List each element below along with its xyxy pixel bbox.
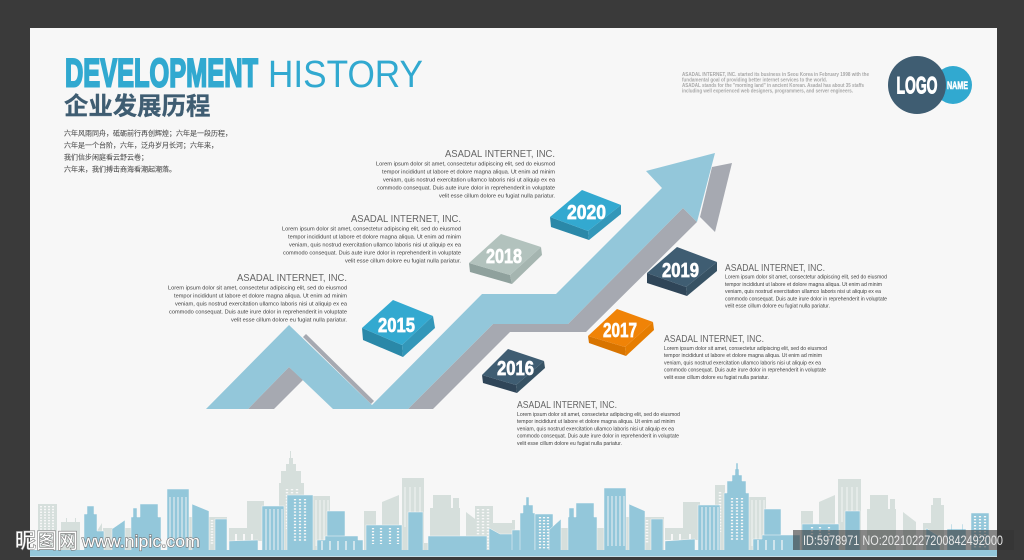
text block 2015: velit esse cillum dolore eu fugiat nulla pariatur. [231,318,347,324]
text block 2018 [282,214,462,264]
text block 2018: tempor incididunt ut labore et dolore magna aliqua. Ut enim ad minim [288,234,461,240]
text block 2020 [376,149,556,200]
text block 2018: veniam, quis nostrud exercitation ullamco laboris nisi ut aliquip ex ea [289,242,462,248]
text block 2015: veniam, quis nostrud exercitation ullamco laboris nisi ut aliquip ex ea [175,302,348,308]
text block 2017: tempor incididunt ut labore et dolore magna aliqua. Ut enim ad minim [664,353,822,359]
tile 2016: 2016 [497,357,534,380]
logo: name circle [934,66,972,104]
watermark left [15,530,200,553]
tile 2018: 2018 [486,245,522,268]
text block 2019: Lorem ipsum dolor sit amet, consectetur adipiscing elit, sed do eiusmod [725,274,887,280]
logo: main circle [888,56,946,114]
text block 2019: commodo consequat. Duis aute irure dolor in reprehenderit in voluptate [725,296,887,302]
watermark left: www.nipic.com [81,533,200,551]
text block 2019: veniam, quis nostrud exercitation ullamco laboris nisi ut aliquip ex ea [725,289,882,295]
text block 2016: tempor incididunt ut labore et dolore magna aliqua. Ut enim ad minim [517,419,675,425]
text block 2015: ASADAL INTERNET, INC. [237,273,347,284]
text block 2017: Lorem ipsum dolor sit amet, consectetur adipiscing elit, sed do eiusmod [664,346,827,352]
logo: LOGO text: LOGO [896,72,938,100]
intro text [64,128,232,174]
text block 2018: velit esse cillum dolore eu fugiat nulla pariatur. [345,258,461,264]
text block 2016: ASADAL INTERNET, INC. [517,400,617,411]
text block 2015: tempor incididunt ut labore et dolore magna aliqua. Ut enim ad minim [174,294,347,300]
text block 2019 [725,263,887,310]
skyline: ground strip [30,550,997,556]
text block 2015: Lorem ipsum dolor sit amet, consectetur adipiscing elit, sed do eiusmod [168,286,347,292]
top right description [682,72,869,94]
text block 2015: commodo consequat. Duis aute irure dolor in reprehenderit in voluptate [169,310,347,316]
text block 2019: velit esse cillum dolore eu fugiat nulla pariatur. [725,304,830,310]
tile 2019: 2019 [662,259,699,282]
tile 2018 [469,234,542,284]
watermark right [793,530,1014,550]
tile 2020: 2020 [567,201,606,224]
text block 2018: Lorem ipsum dolor sit amet, consectetur adipiscing elit, sed do eiusmod [282,226,461,232]
logo [888,56,972,114]
text block 2016: velit esse cillum dolore eu fugiat nulla pariatur. [517,441,622,447]
top right description: including well experienced web designers, programmers, and server engineers. [682,88,853,94]
text block 2020: Lorem ipsum dolor sit amet, consectetur adipiscing elit, sed do eiusmod [376,162,555,168]
tile 2019 [647,247,717,296]
text block 2020: velit esse cillum dolore eu fugiat nulla pariatur. [439,194,555,200]
logo: NAME text: NAME [947,80,968,92]
tile 2015 [362,300,435,357]
intro text: 六年是一个台阶，六年，泛舟岁月长河；六年来， [64,140,218,150]
skyline: blue building details [170,496,985,551]
text block 2016 [517,400,680,447]
text block 2017 [664,334,827,381]
text block 2017: commodo consequat. Duis aute irure dolor in reprehenderit in voluptate [664,368,826,374]
tile 2016 [482,349,545,393]
text block 2016: Lorem ipsum dolor sit amet, consectetur adipiscing elit, sed do eiusmod [517,412,680,418]
text block 2020: commodo consequat. Duis aute irure dolor in reprehenderit in voluptate [377,186,555,192]
text block 2018: commodo consequat. Duis aute irure dolor in reprehenderit in voluptate [283,250,461,256]
text block 2020: ASADAL INTERNET, INC. [445,149,555,160]
tile 2020 [550,190,621,240]
text block 2017: ASADAL INTERNET, INC. [664,334,764,345]
intro text: 六年风雨同舟，砥砺前行再创辉煌；六年是一段历程， [64,128,232,138]
text block 2019: tempor incididunt ut labore et dolore magna aliqua. Ut enim ad minim [725,282,882,288]
text block 2019: ASADAL INTERNET, INC. [725,263,825,274]
skyline: grey building details [41,487,857,549]
top right description: ASADAL INTERNET, INC. started its business in Seou Korea in February 1998 with the [682,72,869,78]
text block 2017: veniam, quis nostrud exercitation ullamco laboris nisi ut aliquip ex ea [664,360,822,366]
tile 2017 [588,309,654,356]
skyline [30,451,997,556]
tile 2015: 2015 [378,314,415,337]
text block 2017: velit esse cillum dolore eu fugiat nulla pariatur. [664,375,769,381]
arrow: light blue body [206,153,715,409]
arrow: grey shadow [248,163,732,409]
text block 2020: veniam, quis nostrud exercitation ullamco laboris nisi ut aliquip ex ea [383,178,556,184]
text block 2020: tempor incididunt ut labore et dolore magna aliqua. Ut enim ad minim [382,170,555,176]
top right description: ASADAL stands for the "morning land" in ancient Korean. Asadal has about 35 staffs [682,83,864,89]
chinese subtitle: 企业发展历程 [64,94,210,120]
top right description: fundamental goal of providing better internet services to the world. [682,78,827,84]
skyline: blue front buildings [84,463,989,551]
tile 2017: 2017 [603,319,637,342]
intro text: 我们信步闲庭看云舒云卷； [64,152,148,162]
text block 2018: ASADAL INTERNET, INC. [351,214,461,225]
growth arrow [206,153,732,409]
intro text: 六年来，我们搏击商海看潮起潮落。 [64,164,176,174]
watermark left: 昵图网 [15,530,78,553]
title: HISTORY: HISTORY [268,54,423,96]
text block 2016: commodo consequat. Duis aute irure dolor in reprehenderit in voluptate [517,434,679,440]
title: DEVELOPMENT: DEVELOPMENT [65,52,258,96]
text block 2016: veniam, quis nostrud exercitation ullamco laboris nisi ut aliquip ex ea [517,426,675,432]
skyline: grey back buildings [38,451,944,551]
main title [65,52,423,96]
text block 2015 [168,273,348,324]
